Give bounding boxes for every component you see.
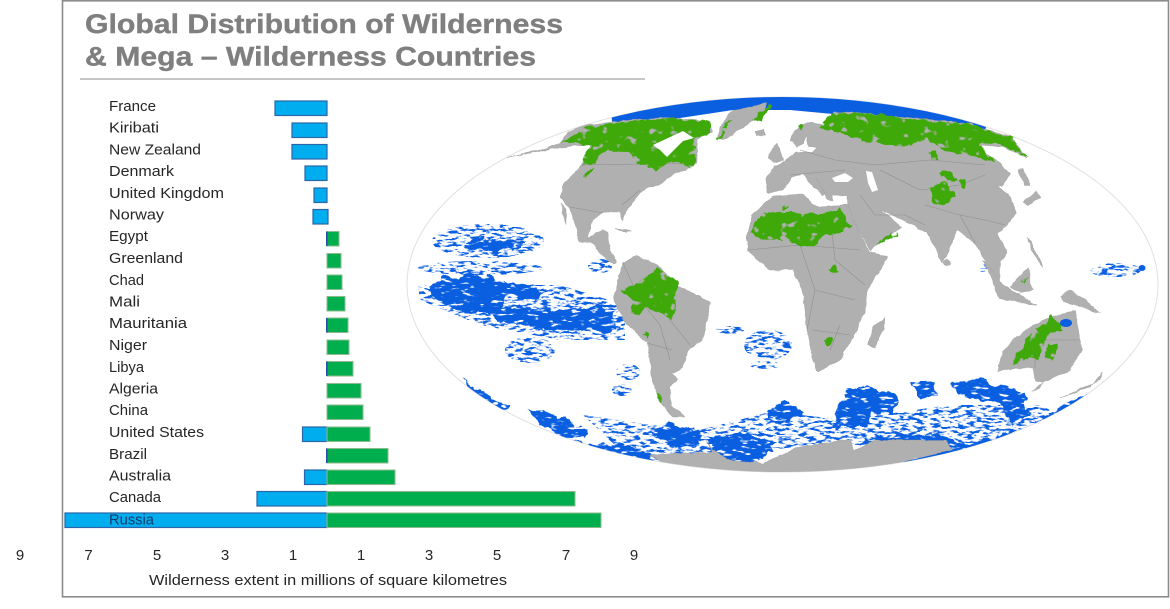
Borneo patch [1020,276,1027,284]
country labels: Mauritania [109,315,188,332]
x axis numbers: 5 [153,547,161,564]
Amazon [622,267,677,320]
north Australia coastal wilderness [1060,319,1072,327]
Greenland coast [718,118,733,140]
x axis numbers: 3 [425,547,433,564]
wilderness on land [560,104,1063,405]
x axis numbers: 9 [16,547,24,564]
title [85,9,563,72]
Sri Lanka [944,260,950,266]
x axis numbers: 9 [630,547,638,564]
ocean wilderness dense patches [428,239,1095,466]
bars: negative side [65,101,328,528]
country labels: China [109,402,149,419]
world map [407,90,1158,480]
title: & Mega – Wilderness Countries [85,42,536,72]
Eurasia [766,112,1027,287]
country labels: Russia [109,512,155,528]
Antarctica [650,438,954,472]
country labels: Denmark [109,163,175,180]
Hudson Bay [653,131,694,157]
Sahara [750,208,852,247]
Borneo [1010,268,1033,292]
x axis numbers [16,547,638,564]
Canada and Alaska wilderness [560,118,710,170]
x axis title: Wilderness extent in millions of square kilometres [149,572,507,589]
Tasmania [1032,382,1043,392]
Mongolia patches [940,172,957,181]
United Kingdom [767,143,783,163]
New Zealand [1060,372,1103,398]
country labels: United States [109,424,204,441]
country labels: Canada [109,489,162,506]
Rocky Mountains patch [585,167,593,177]
country borders [570,150,1078,368]
Madagascar [868,317,885,348]
x axis numbers: 7 [84,547,93,564]
ocean wilderness speckle [418,224,1141,455]
inland seas [832,171,878,192]
New Guinea [1060,290,1100,313]
Morocco patch [781,204,787,210]
Australia wilderness [1013,315,1063,365]
country labels: Greenland [109,250,183,267]
Scandinavia patch [800,124,804,130]
Botswana [825,337,833,345]
land masses [507,103,1103,480]
x axis numbers: 3 [221,547,229,564]
country labels: Australia [109,468,172,484]
bars: positive side [326,232,601,528]
x axis numbers: 7 [562,547,570,564]
arctic wilderness band [612,97,986,130]
Iceland [755,129,765,135]
Russia [820,112,1027,162]
Tibet [930,182,957,205]
Andes patch [644,334,650,338]
Greenland [718,103,767,140]
country labels: United Kingdom [109,185,224,202]
country labels: New Zealand [109,142,201,158]
North America [507,118,712,265]
country labels: Kiribati [109,120,159,136]
Japan [1023,190,1040,206]
Australia [997,310,1082,382]
country labels [109,98,224,528]
x axis numbers: 5 [493,547,501,564]
country labels: Mali [109,294,140,310]
country labels: Brazil [109,446,147,463]
Africa [747,194,888,372]
Sumatra and Java [985,263,1037,305]
Philippines [1027,237,1043,267]
Baja California [562,203,566,224]
west Pacific wilderness [1138,265,1146,271]
South America [613,255,710,417]
Sakhalin [1018,168,1030,186]
bar chart [16,98,638,589]
country labels: Libya [109,359,145,376]
title: Global Distribution of Wilderness [85,9,563,39]
country labels: Chad [109,272,144,289]
Cuba [615,228,632,233]
Antarctic coast wilderness strip [873,450,955,473]
country labels: Algeria [109,380,159,398]
country labels: Egypt [109,228,149,245]
Patagonia [656,392,662,405]
country labels: France [109,98,156,115]
country labels: Niger [109,337,147,354]
Arabian Empty Quarter [878,230,896,243]
x axis numbers: 1 [289,547,297,564]
Congo patch [829,264,837,272]
country labels: Norway [109,206,165,224]
x axis numbers: 1 [357,547,365,564]
